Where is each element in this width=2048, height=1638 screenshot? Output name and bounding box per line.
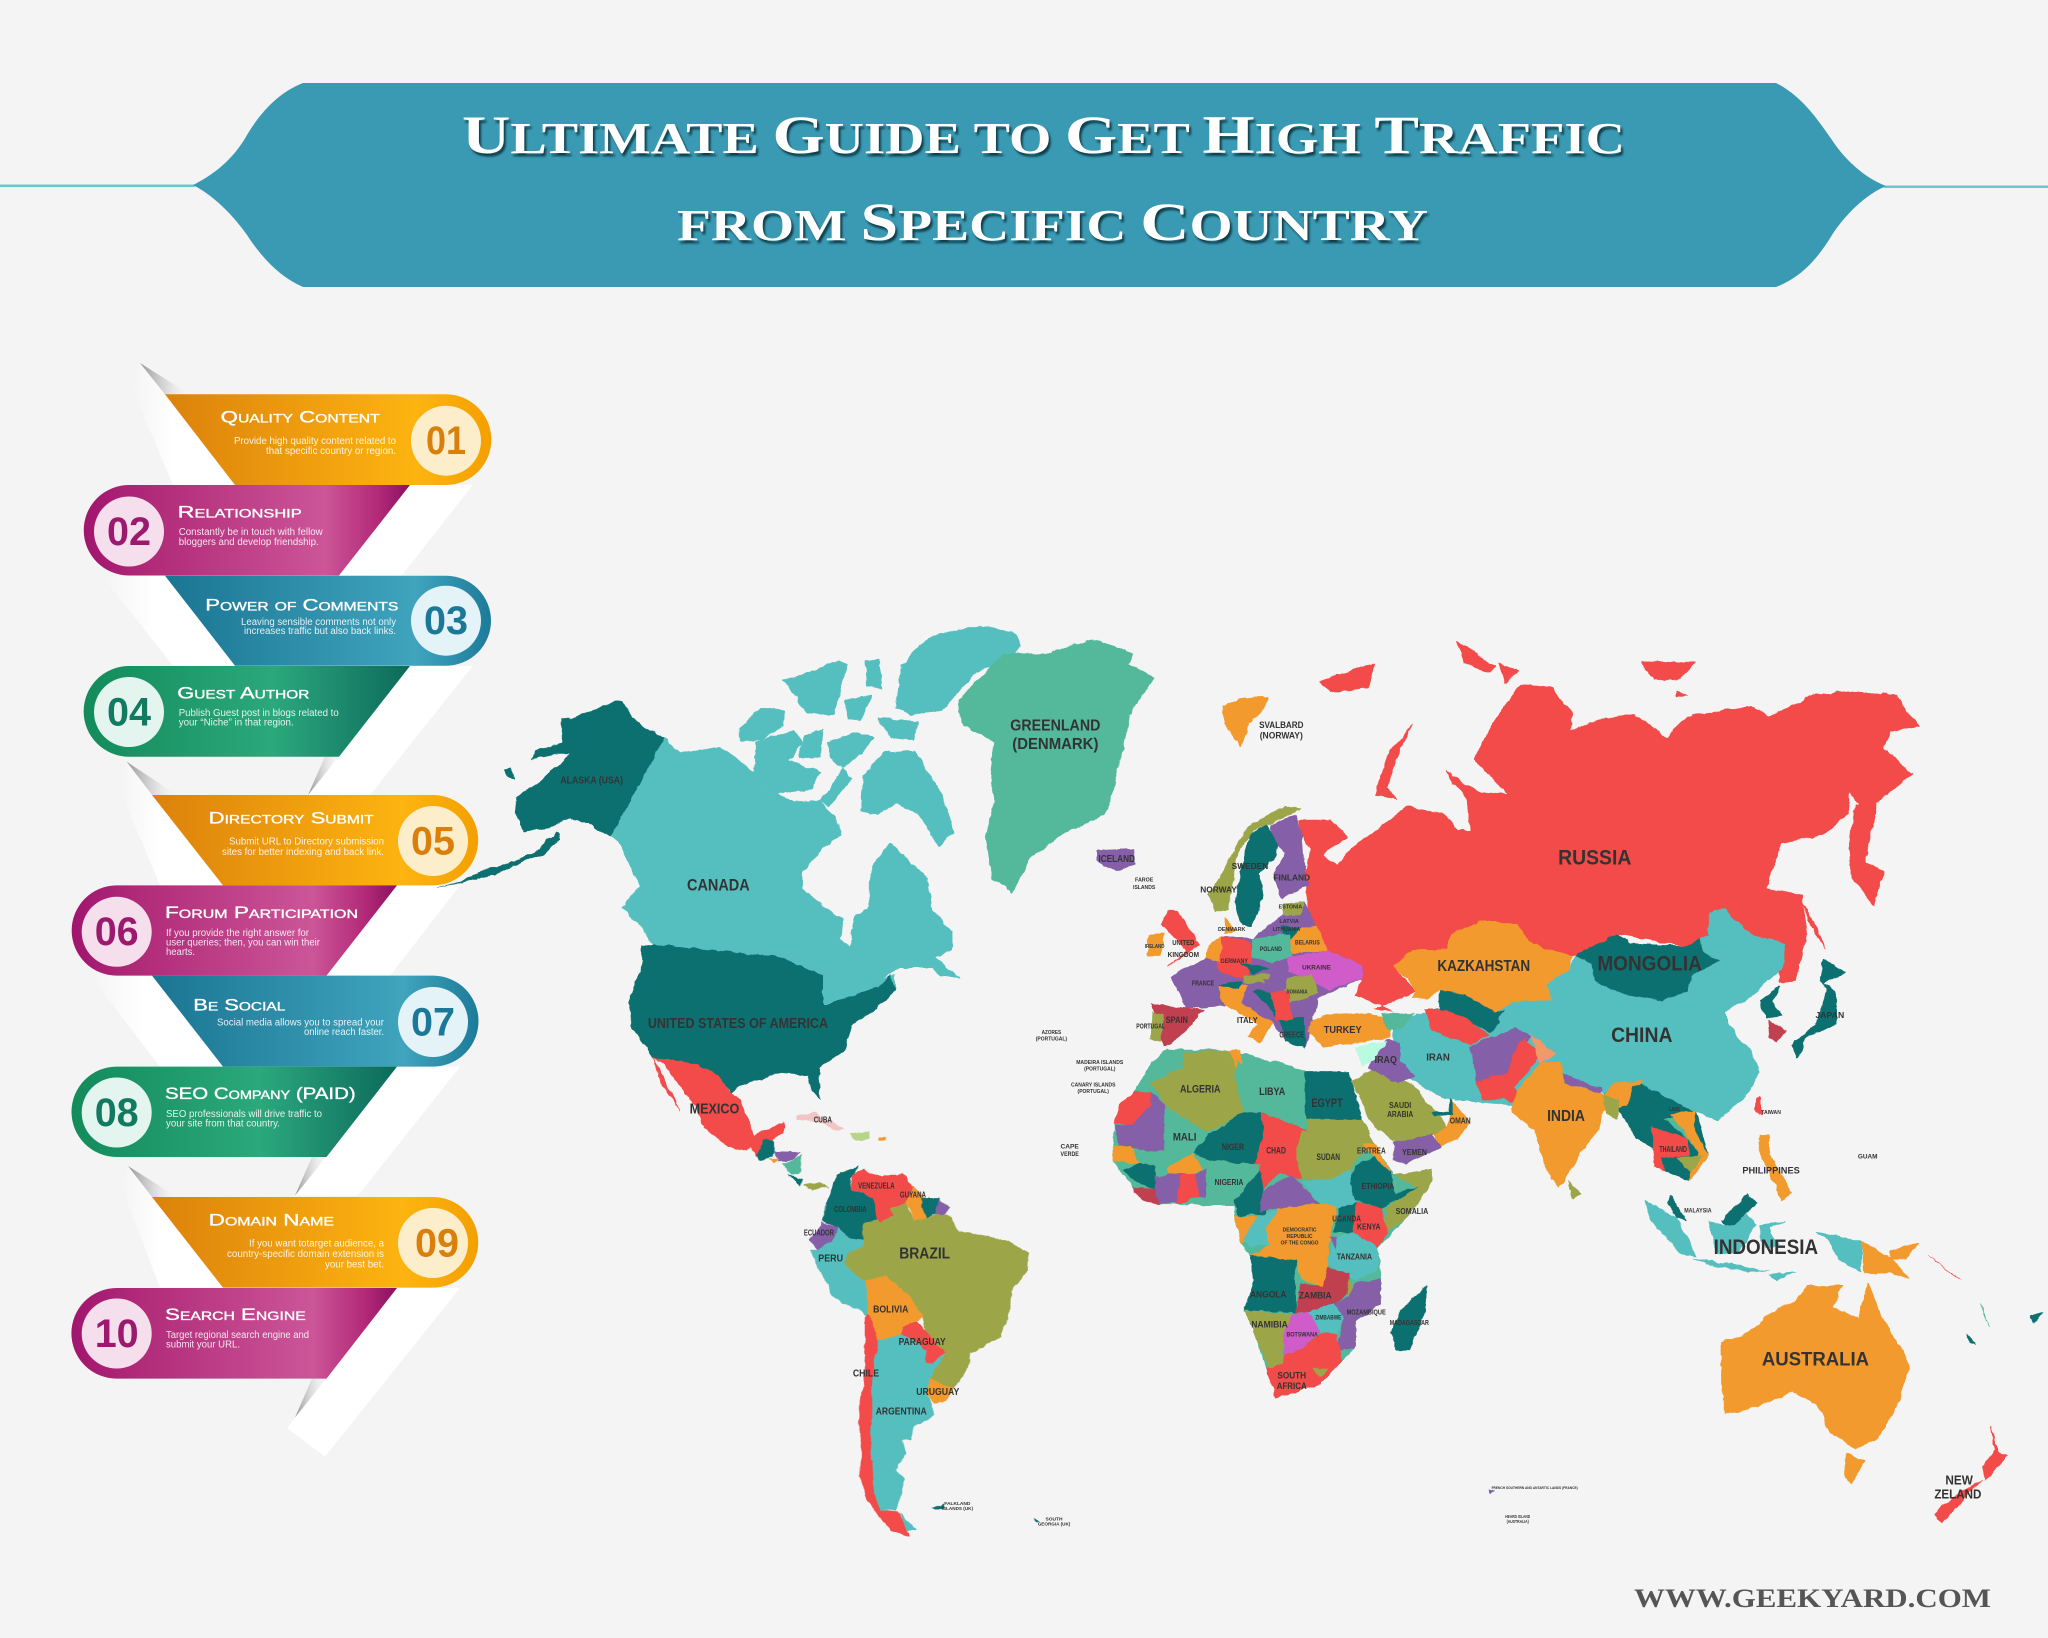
panel: 07 Be Social: Be Social: [193, 996, 286, 1015]
panel: 01 Quality Content: 01: [426, 419, 466, 463]
map country labels: EGYPT: [1311, 1097, 1343, 1110]
map country labels: MONGOLIA: [1597, 952, 1702, 975]
map country labels: UKRAINE: [1302, 964, 1332, 971]
map country labels: PORTUGAL: [1136, 1023, 1165, 1031]
map country labels: BELARUS: [1295, 940, 1320, 947]
map: Central and South America: [750, 1113, 1039, 1537]
panel: 05 Directory Submit: [152, 795, 478, 885]
map country labels: FALKLAND: [944, 1501, 971, 1506]
map country labels: MEXICO: [690, 1100, 740, 1117]
map country labels: INDONESIA: [1714, 1236, 1818, 1259]
map country labels: IRAQ: [1375, 1055, 1397, 1066]
map country labels: GERMANY: [1221, 958, 1249, 965]
map country labels: ZIMBABWE: [1315, 1314, 1342, 1321]
watermark: website: WWW.GEEKYARD.COM: [1634, 1584, 1991, 1613]
map country labels: CANADA: [687, 877, 750, 895]
panel: 08 SEO Company (PAID): your site from that country.: [166, 1118, 280, 1130]
map country labels: CAPE: [1061, 1143, 1079, 1150]
panel: 06 Forum Participation: [72, 885, 397, 976]
world map shapes: [437, 625, 2043, 1537]
map country labels: MALI: [1173, 1132, 1196, 1144]
map country labels: INDIA: [1547, 1108, 1585, 1125]
map country labels: [560, 718, 1981, 1527]
panel: 01 Quality Content: Provide high quality content related to: [234, 436, 396, 447]
panel: 09 Domain Name: country-specific domain extension is: [227, 1249, 384, 1260]
panel: 07 Be Social: online reach faster.: [304, 1027, 384, 1038]
map country labels: NAMIBIA: [1251, 1319, 1288, 1329]
map country labels: UGANDA: [1332, 1214, 1361, 1224]
map country labels: AZORES: [1042, 1030, 1061, 1036]
map country labels: VERDE: [1061, 1151, 1079, 1158]
panel: 02 Relationship: [84, 485, 410, 576]
panel: 09 Domain Name: If you want totarget audience, a: [249, 1239, 384, 1250]
map country labels: ETHIOPIA: [1362, 1181, 1394, 1191]
map country labels: DENMARK: [1218, 927, 1246, 933]
panel: 01 Quality Content: Quality Content: [221, 408, 381, 427]
panel: 02 Relationship: 02: [107, 510, 151, 554]
map country labels: SOUTH: [1277, 1370, 1306, 1380]
map country labels: ALASKA (USA): [560, 776, 623, 787]
panel: 07 Be Social: [152, 976, 478, 1067]
map country labels: SUDAN: [1317, 1152, 1340, 1162]
panel: 10 Search Engine: Search Engine: [165, 1305, 306, 1324]
map country labels: GUYANA: [900, 1191, 926, 1200]
map country labels: ISLANDS (UK): [942, 1506, 974, 1511]
map country labels: MOZAMBIQUE: [1347, 1309, 1386, 1317]
banner left line: [0, 184, 195, 187]
map country labels: CHINA: [1611, 1024, 1672, 1047]
panel: 10 Search Engine: [71, 1288, 397, 1379]
map country labels: ARGENTINA: [876, 1406, 927, 1417]
map country labels: NEW: [1945, 1472, 1973, 1487]
map country labels: AFRICA: [1277, 1381, 1307, 1391]
map country labels: UNITED STATES OF AMERICA: [648, 1016, 828, 1032]
map country labels: BOLIVIA: [873, 1305, 909, 1316]
map country labels: IRELAND: [1145, 944, 1164, 950]
map country labels: CANARY ISLANDS: [1071, 1082, 1115, 1088]
map country labels: GEORGIA (UK): [1038, 1522, 1071, 1527]
title line 1: ULTIMATE GUIDE TO GET HIGH TRAFFIC: [462, 105, 1625, 165]
panel: 08 SEO Company (PAID): 08: [95, 1091, 139, 1135]
map country labels: URUGUAY: [916, 1387, 959, 1398]
map country labels: ALGERIA: [1180, 1083, 1221, 1095]
map country labels: MADEIRA ISLANDS: [1076, 1060, 1123, 1066]
panel: 06 Forum Participation: Forum Participation: [165, 903, 358, 922]
map country labels: CHAD: [1266, 1146, 1286, 1156]
title banner: [0, 83, 2048, 287]
panel: 01 Quality Content: that specific country or region.: [266, 446, 396, 457]
map country labels: VENEZUELA: [858, 1181, 895, 1190]
map country labels: PERU: [818, 1254, 843, 1265]
map country labels: KENYA: [1357, 1221, 1381, 1231]
map country labels: MALAYSIA: [1684, 1207, 1712, 1214]
panel: 04 Guest Author: Guest Author: [177, 683, 310, 702]
map country labels: OMAN: [1450, 1116, 1471, 1126]
map country labels: NIGER: [1222, 1142, 1244, 1152]
panel: 10 Search Engine: Target regional search engine and: [166, 1330, 309, 1341]
map country labels: HEARD ISLAND: [1505, 1514, 1531, 1519]
map country labels: THAILAND: [1659, 1145, 1687, 1154]
map country labels: LITHUANIA: [1273, 927, 1301, 933]
map country labels: ECUADOR: [804, 1228, 834, 1237]
panel: 03 Power of Comments: 03: [424, 599, 468, 643]
map country labels: (NORWAY): [1260, 730, 1303, 740]
panel: 06 Forum Participation: If you provide the right answer for: [166, 928, 310, 939]
map country labels: GREECE: [1279, 1029, 1304, 1039]
map country labels: CUBA: [814, 1114, 832, 1124]
panel: 05 Directory Submit: Submit URL to Directory submission: [229, 837, 384, 848]
map country labels: KINGDOM: [1168, 951, 1199, 959]
panel: 04 Guest Author: 04: [107, 690, 152, 734]
title line 2: FROM SPECIFIC COUNTRY: [677, 192, 1428, 252]
map country labels: PHILIPPINES: [1742, 1165, 1800, 1175]
panel: 10 Search Engine: 10: [95, 1312, 139, 1356]
map country labels: ICELAND: [1098, 854, 1135, 865]
map country labels: ANGOLA: [1250, 1289, 1287, 1299]
map country labels: GUAM: [1858, 1154, 1878, 1161]
panel: 09 Domain Name: Domain Name: [209, 1210, 334, 1229]
panel: 05 Directory Submit: Directory Submit: [209, 808, 375, 827]
map country labels: TANZANIA: [1337, 1251, 1372, 1261]
map country labels: BRAZIL: [899, 1245, 951, 1262]
panel: 04 Guest Author: Publish Guest post in blogs related to: [179, 708, 339, 719]
map country labels: FAROE: [1135, 877, 1153, 883]
panel: 03 Power of Comments: Power of Comments: [205, 596, 398, 615]
map country labels: LATVIA: [1279, 919, 1300, 925]
panel: 02 Relationship: bloggers and develop friendship.: [179, 537, 319, 548]
panel: 09 Domain Name: your best bet.: [325, 1260, 384, 1270]
map country labels: (AUSTRALIA): [1507, 1519, 1529, 1524]
map country labels: AUSTRALIA: [1762, 1349, 1869, 1371]
map country labels: SOUTH: [1046, 1516, 1063, 1521]
map country labels: CHILE: [853, 1369, 879, 1380]
map country labels: SWEDEN: [1232, 861, 1268, 871]
map country labels: YEMEN: [1402, 1147, 1427, 1157]
panel: 06 Forum Participation: user queries; then, you can win their: [166, 938, 321, 949]
map country labels: ZAMBIA: [1299, 1291, 1332, 1301]
panel: 08 SEO Company (PAID): SEO professionals will drive traffic to: [166, 1109, 322, 1120]
panel: 03 Power of Comments: Leaving sensible comments not only: [241, 617, 396, 628]
panel: 10 Search Engine: submit your URL.: [166, 1340, 240, 1351]
panel: 02 Relationship: Relationship: [178, 502, 302, 521]
panel: 06 Forum Participation: 06: [95, 910, 139, 954]
banner right line: [1884, 186, 2048, 188]
panel: 06 Forum Participation: hearts.: [166, 947, 195, 958]
map country labels: ITALY: [1237, 1015, 1258, 1025]
panel: 05 Directory Submit: sites for better indexing and back link.: [222, 847, 384, 858]
map country labels: (PORTUGAL): [1084, 1067, 1115, 1073]
banner shape: [193, 83, 1886, 287]
panel: 03 Power of Comments: [165, 576, 491, 666]
map country labels: LIBYA: [1259, 1086, 1285, 1098]
panel: 08 SEO Company (PAID): SEO Company (PAID): [165, 1084, 356, 1103]
map country labels: TAIWAN: [1761, 1110, 1781, 1116]
panel: 03 Power of Comments: increases traffic but also back links.: [244, 626, 396, 637]
map country labels: KAZKAHSTAN: [1437, 958, 1530, 975]
map: Africa, Arabia, South-East Asia and Oceania: [1114, 1050, 2043, 1523]
map country labels: DEMOCRATIC: [1283, 1227, 1317, 1233]
map country labels: UNITED: [1172, 939, 1194, 947]
panel: 05 Directory Submit: 05: [411, 820, 455, 864]
panel: 04 Guest Author: [84, 666, 410, 757]
map country labels: MADAGASCAR: [1390, 1319, 1429, 1327]
map country labels: ROMANIA: [1287, 990, 1308, 996]
map: Europe, Russia and Asia: [1147, 641, 1919, 1188]
map country labels: FRENCH SOUTHERN AND ANTARTIC LANDS (FRANCE): [1492, 1485, 1578, 1490]
map country labels: FRANCE: [1192, 979, 1214, 987]
map country labels: GREENLAND: [1010, 718, 1100, 735]
map country labels: BOTSWANA: [1287, 1331, 1318, 1338]
map country labels: FINLAND: [1273, 873, 1310, 883]
map country labels: ERITREA: [1357, 1146, 1386, 1156]
map country labels: TURKEY: [1324, 1025, 1362, 1036]
panel: 04 Guest Author: your “Niche” in that region.: [179, 718, 294, 729]
map country labels: ESTONIA: [1279, 905, 1303, 911]
map country labels: POLAND: [1260, 946, 1282, 953]
map country labels: SPAIN: [1166, 1015, 1188, 1025]
map country labels: OF THE CONGO: [1281, 1240, 1319, 1246]
map country labels: SVALBARD: [1259, 720, 1304, 730]
panel: 01 Quality Content: [165, 394, 491, 485]
panel: 02 Relationship: Constantly be in touch with fellow: [179, 527, 323, 538]
map country labels: (PORTUGAL): [1036, 1037, 1067, 1043]
panel: 07 Be Social: Social media allows you to spread your: [217, 1018, 385, 1028]
map country labels: NORWAY: [1200, 884, 1237, 894]
map country labels: RUSSIA: [1558, 847, 1631, 870]
map country labels: ARABIA: [1387, 1109, 1413, 1119]
map country labels: SAUDI: [1389, 1100, 1411, 1110]
map country labels: (PORTUGAL): [1078, 1089, 1109, 1095]
map country labels: (DENMARK): [1012, 736, 1098, 753]
map country labels: NIGERIA: [1215, 1177, 1243, 1187]
map country labels: IRAN: [1426, 1052, 1450, 1063]
map country labels: PARAGUAY: [899, 1337, 946, 1348]
map country labels: REPUBLIC: [1287, 1234, 1313, 1240]
map country labels: ZELAND: [1934, 1487, 1981, 1502]
panel: 08 SEO Company (PAID): [71, 1067, 397, 1157]
map: North America and Greenland: [437, 625, 1155, 1150]
map country labels: JAPAN: [1815, 1010, 1844, 1020]
map country labels: ISLANDS: [1133, 885, 1155, 891]
panel: ribbon fold bands: [90, 363, 473, 1457]
panel: 09 Domain Name: 09: [415, 1222, 459, 1266]
map country labels: LAOS: [1669, 1107, 1680, 1113]
map country labels: SOMALIA: [1396, 1206, 1428, 1216]
panel: 09 Domain Name: [152, 1197, 478, 1288]
panel: 07 Be Social: 07: [411, 1000, 455, 1044]
map country labels: COLOMBIA: [834, 1205, 867, 1214]
